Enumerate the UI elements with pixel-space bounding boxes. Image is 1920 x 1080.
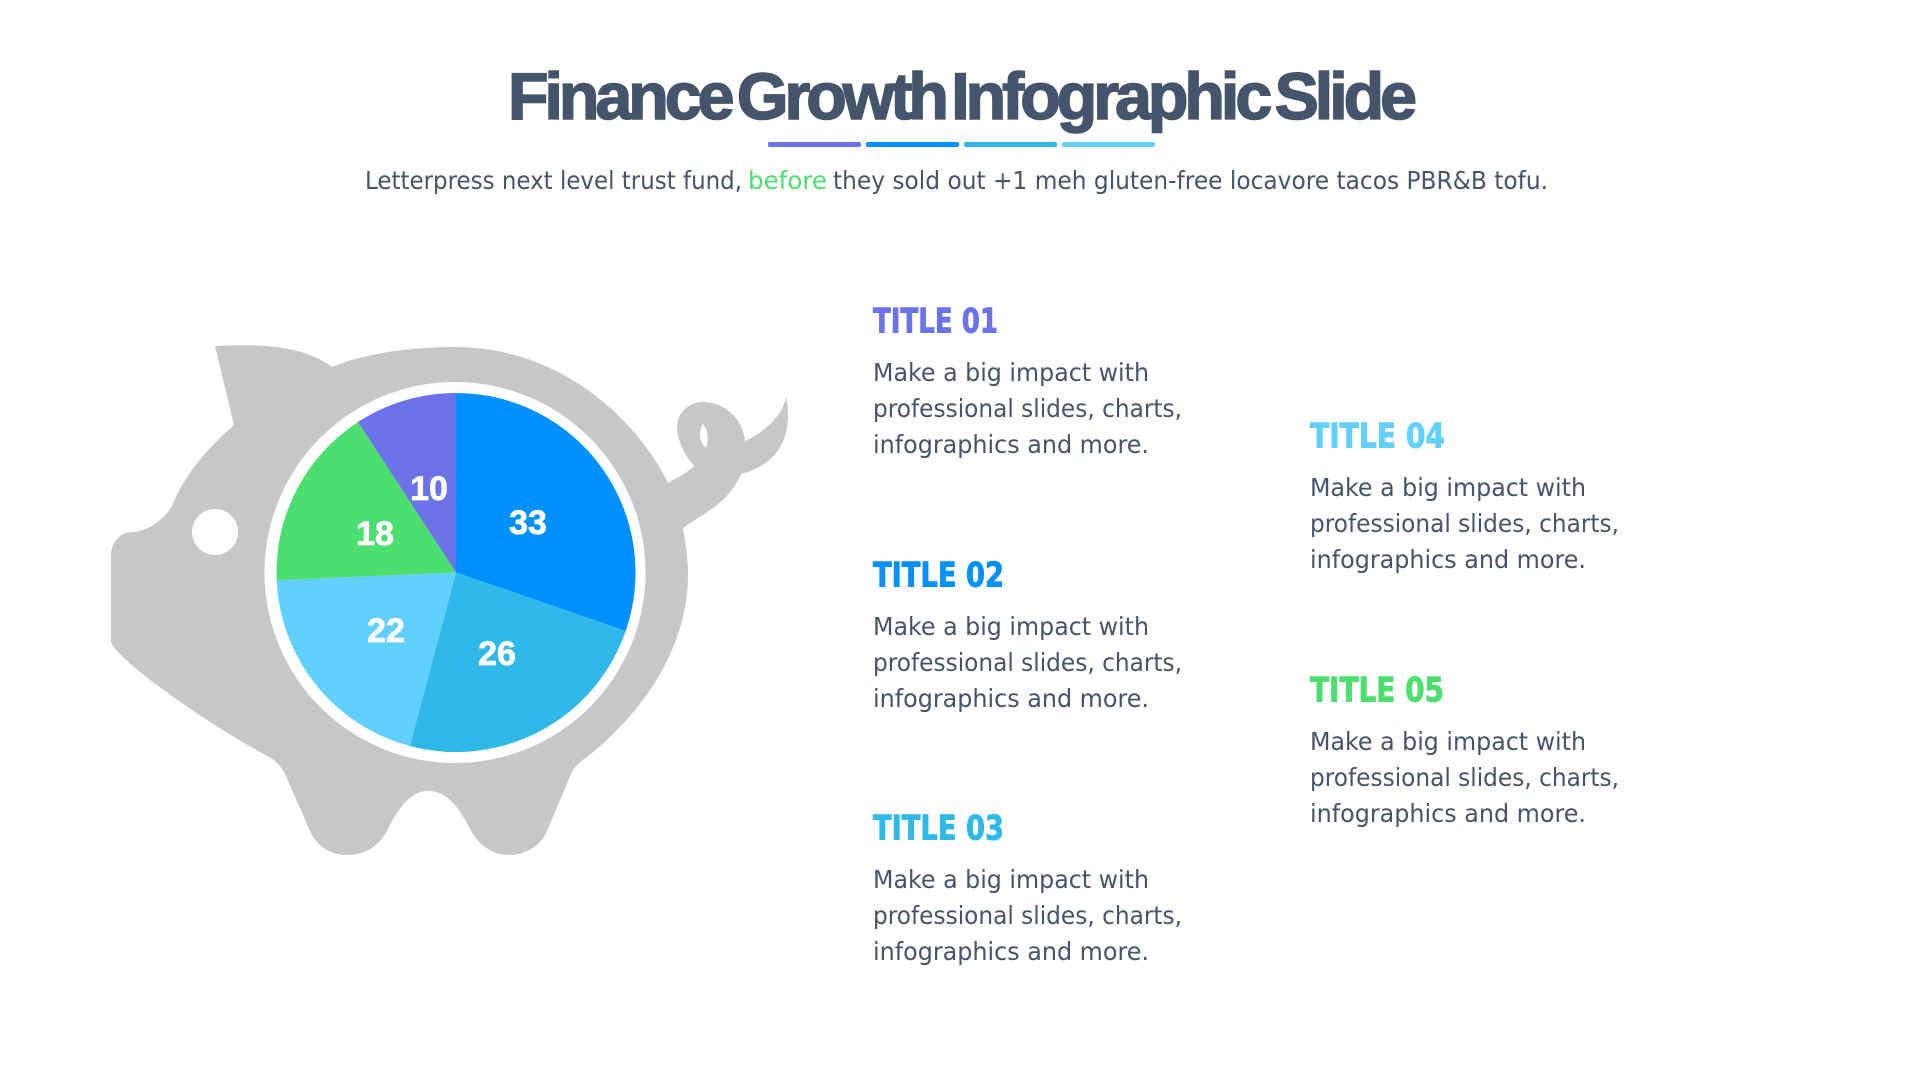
slice 33	[456, 393, 636, 631]
pie value labels	[356, 470, 547, 673]
white ring	[264, 382, 646, 763]
pie value labels: 26	[478, 635, 516, 673]
item: title 03	[873, 808, 1182, 966]
slice 18	[277, 422, 456, 580]
item: title 02	[873, 556, 1182, 713]
item: title 04: professional slides, charts,	[1310, 509, 1619, 538]
item: title 01: TITLE 01	[873, 302, 998, 342]
item: title 02: infographics and more.	[873, 684, 1149, 713]
pie value labels: 10	[410, 470, 448, 508]
pie value labels: 33	[509, 504, 547, 542]
item: title 04: infographics and more.	[1310, 545, 1586, 574]
item: title 01: Make a big impact with	[873, 358, 1149, 387]
slice 10	[358, 393, 456, 572]
item: title 04: Make a big impact with	[1310, 473, 1586, 502]
item: title 03: infographics and more.	[873, 937, 1149, 966]
item: title 02: Make a big impact with	[873, 612, 1149, 641]
item: title 05: professional slides, charts,	[1310, 763, 1619, 792]
subtitle: before	[748, 166, 827, 195]
item: title 03: TITLE 03	[873, 808, 1004, 848]
subtitle: they sold out +1 meh gluten-free locavore tacos PBR&B tofu.	[833, 166, 1548, 195]
title: Finance Growth Infographic Slide	[508, 59, 1415, 133]
item: title 05: TITLE 05	[1310, 670, 1444, 710]
slice 22	[277, 572, 456, 746]
title underline bars	[768, 142, 1155, 147]
item: title 05	[1310, 670, 1619, 828]
item: title 01: professional slides, charts,	[873, 394, 1182, 423]
slice 26	[410, 572, 626, 752]
item: title 05: infographics and more.	[1310, 799, 1586, 828]
item: title 02: professional slides, charts,	[873, 648, 1182, 677]
pig eye	[192, 509, 238, 555]
pig silhouette	[111, 345, 788, 855]
pie value labels: 18	[356, 515, 394, 553]
piggy bank pie chart	[111, 345, 788, 855]
item: title 01: infographics and more.	[873, 430, 1149, 459]
item: title 04: TITLE 04	[1310, 416, 1445, 456]
item: title 05: Make a big impact with	[1310, 727, 1586, 756]
subtitle	[365, 166, 1548, 195]
tail hole	[700, 424, 708, 448]
item: title 02: TITLE 02	[873, 556, 1004, 596]
item: title 01	[873, 302, 1182, 459]
item: title 03: professional slides, charts,	[873, 901, 1182, 930]
subtitle: Letterpress next level trust fund,	[365, 166, 742, 195]
pie value labels: 22	[367, 612, 405, 650]
item: title 03: Make a big impact with	[873, 865, 1149, 894]
item: title 04	[1310, 416, 1619, 574]
